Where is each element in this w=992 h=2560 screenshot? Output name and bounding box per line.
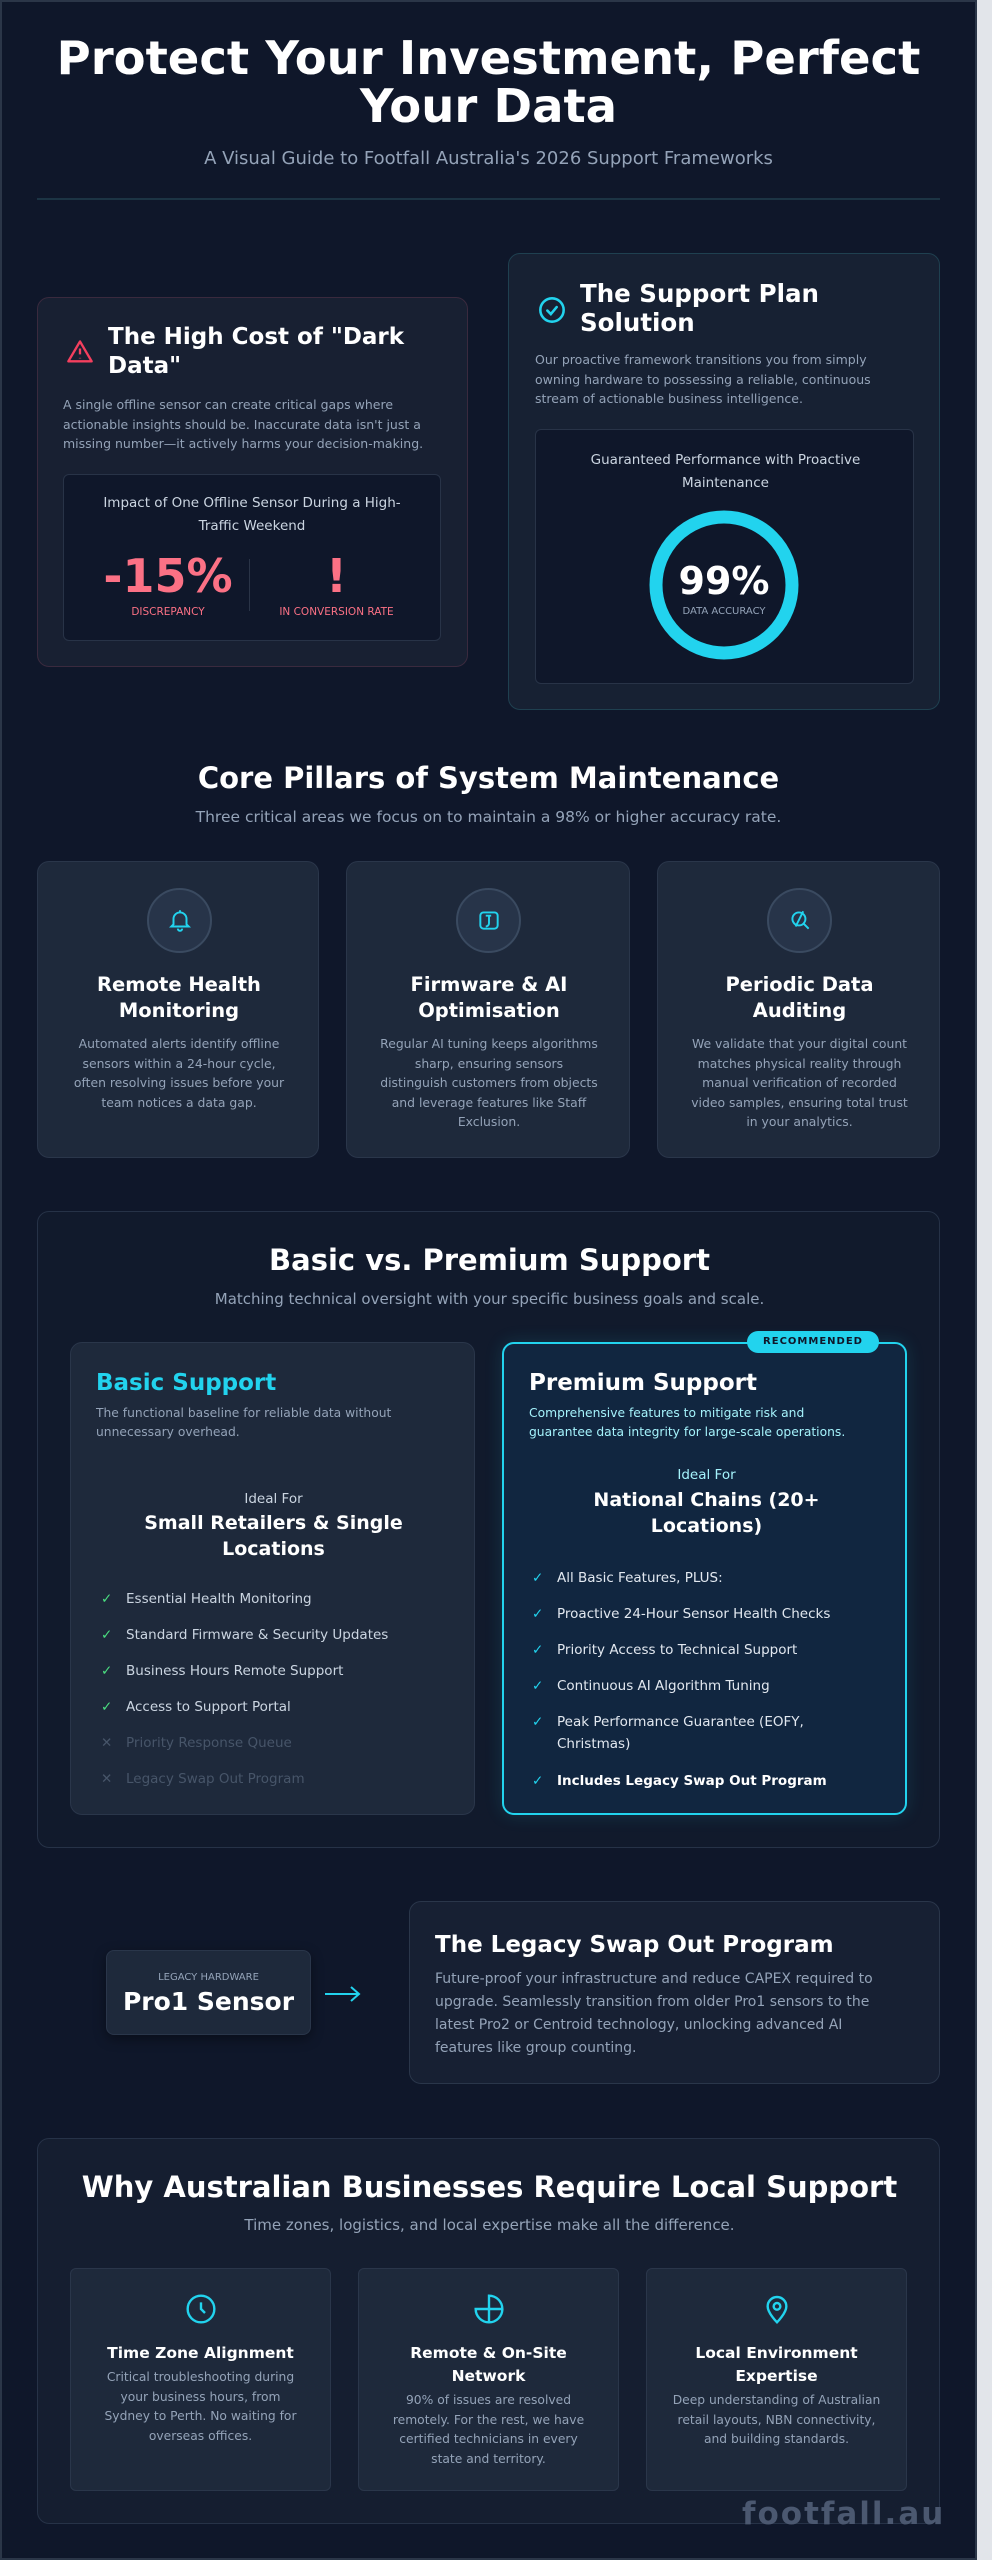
feature list: ✓ (532, 1606, 543, 1622)
card: basic: The functional baseline for reliable data without unnecessary overhead. (96, 1406, 391, 1439)
card: time zone (70, 2268, 331, 2491)
stat box (63, 474, 441, 641)
stat: conversion: IN CONVERSION RATE (279, 606, 394, 618)
card: premium: National Chains (20+ Locations) (593, 1489, 820, 1537)
card: basic: Small Retailers & Single Locations (144, 1512, 403, 1560)
feature list: Proactive 24-Hour Sensor Health Checks (557, 1606, 830, 1622)
feature list: Priority Access to Technical Support (557, 1642, 797, 1658)
feature list: ✓ (101, 1627, 112, 1643)
panel: local support: Time zones, logistics, and local expertise make all the difference. (244, 2216, 735, 2234)
heading: Basic vs. Premium Support (269, 1243, 710, 1277)
legacy hardware box: Pro1 Sensor (123, 1987, 294, 2016)
pillar: firmware: Firmware & AI Optimisation (411, 973, 567, 1022)
pillar: auditing: Periodic Data Auditing (725, 973, 874, 1022)
donut chart 99% (650, 510, 798, 660)
legacy hardware box: LEGACY HARDWARE (158, 1972, 259, 1983)
stat: -15%: -15% (103, 549, 233, 603)
feature list: ✓ (532, 1773, 543, 1789)
feature list: All Basic Features, PLUS: (557, 1570, 723, 1586)
pillar: firmware: Exclusion. (458, 1114, 520, 1129)
badge: recommended (747, 1331, 879, 1353)
pillar: firmware: distinguish customers from objects (380, 1075, 598, 1090)
heading: The Support Plan Solution (580, 279, 819, 337)
icon: audit (767, 888, 832, 953)
pillar: firmware: Regular AI tuning keeps algorithms (380, 1036, 598, 1051)
pillar: firmware: sharp, ensuring sensors (415, 1056, 563, 1071)
card: time zone: Time Zone Alignment (107, 2344, 294, 2362)
text: A single offline sensor can create critical gaps where actionable insights should be. Inaccurate data isn't just a missing number—it actively harms your decision-making. (63, 397, 423, 451)
feature list: Priority Response Queue (126, 1735, 292, 1751)
panel: basic vs premium (37, 1211, 940, 1848)
card: premium: Ideal For (677, 1467, 736, 1483)
title: Protect Your Investment, Perfect Your Data (57, 31, 920, 133)
feature list: ✓ (532, 1714, 543, 1730)
feature list: ✓ (532, 1642, 543, 1658)
pillar: auditing (657, 861, 940, 1158)
icon: firmware (456, 888, 521, 953)
panel: local support (37, 2138, 940, 2524)
feature list: Standard Firmware & Security Updates (126, 1627, 388, 1643)
feature list: ✓ (101, 1699, 112, 1715)
feature list: Essential Health Monitoring (126, 1591, 312, 1607)
stat box: Impact of One Offline Sensor During a High-Traffic Weekend (103, 495, 401, 534)
feature list: Continuous AI Algorithm Tuning (557, 1678, 770, 1694)
heading: The High Cost of "Dark Data" (108, 324, 404, 379)
card: network: 90% of issues are resolved remotely. For the rest, we have certified technicians in every state and territory. (393, 2393, 584, 2466)
panel: dark data (37, 297, 468, 667)
chart box: Guaranteed Performance with Proactive Maintenance (591, 452, 860, 491)
donut chart 99%: DATA ACCURACY (682, 606, 766, 617)
panel: legacy swap out: Future-proof your infrastructure and reduce CAPEX required to upgrade. Seamlessly transition from older Pro1 sensors to the latest Pro2 or Centroid technology, unlocking advanced AI features like group counting. (435, 1971, 873, 2056)
icon: bell (147, 888, 212, 953)
feature list: ✓ (532, 1678, 543, 1694)
feature list: ✕ (101, 1771, 112, 1787)
panel: legacy swap out (409, 1901, 940, 2084)
stat: conversion: ! (326, 549, 347, 603)
badge: recommended: RECOMMENDED (763, 1336, 863, 1347)
card: local expertise (646, 2268, 907, 2491)
icon: clock (186, 2294, 216, 2324)
panel: legacy swap out: The Legacy Swap Out Program (435, 1932, 834, 1958)
feature list: ✓ (101, 1591, 112, 1607)
chart box (535, 429, 914, 684)
feature list: ✓ (101, 1663, 112, 1679)
card: local expertise: Deep understanding of Australian retail layouts, NBN connectivity, and building standards. (673, 2393, 880, 2446)
card: network: Remote & On-Site Network (410, 2344, 567, 2385)
subtitle: A Visual Guide to Footfall Australia's 2026 Support Frameworks (204, 148, 773, 169)
pillar: remote health (37, 861, 319, 1158)
feature list: Includes Legacy Swap Out Program (557, 1773, 827, 1789)
pillar: firmware (346, 861, 630, 1158)
feature list: Access to Support Portal (126, 1699, 291, 1715)
icon: network (474, 2294, 504, 2324)
feature list (101, 1591, 388, 1787)
card: premium (502, 1342, 907, 1815)
donut chart 99%: 99% (679, 559, 769, 603)
pillar: firmware: and leverage features like Staff (392, 1095, 586, 1110)
subtitle: Matching technical oversight with your specific business goals and scale. (215, 1290, 764, 1308)
feature list: Business Hours Remote Support (126, 1663, 343, 1679)
card: basic: Basic Support (96, 1370, 276, 1396)
feature list: Peak Performance Guarantee (EOFY, Christmas) (557, 1714, 804, 1752)
card: network (358, 2268, 619, 2491)
panel: support plan solution (508, 253, 940, 710)
subtitle: Three critical areas we focus on to maintain a 98% or higher accuracy rate. (196, 808, 781, 826)
icon: check circle (539, 297, 565, 323)
panel: local support: Why Australian Businesses Require Local Support (82, 2170, 897, 2204)
text: Our proactive framework transitions you from simply owning hardware to possessing a reliable, continuous stream of actionable business intelligence. (535, 352, 871, 406)
card: premium: Comprehensive features to mitigate risk and guarantee data integrity for large-scale operations. (529, 1406, 845, 1439)
card: basic: Ideal For (244, 1491, 303, 1507)
card: local expertise: Local Environment Expertise (695, 2344, 858, 2385)
feature list: ✓ (532, 1570, 543, 1586)
feature list (532, 1570, 830, 1789)
icon: warning (67, 340, 93, 362)
stat: -15%: DISCREPANCY (131, 606, 205, 618)
feature list: Legacy Swap Out Program (126, 1771, 305, 1787)
card: time zone: Critical troubleshooting during your business hours, from Sydney to Perth. No waiting for overseas offices. (104, 2370, 296, 2443)
feature list: ✕ (101, 1735, 112, 1751)
icon: map pin (766, 2296, 788, 2324)
watermark: footfall.au: footfall.au (742, 2496, 945, 2532)
heading: core pillars: Core Pillars of System Maintenance (198, 761, 779, 795)
pillar: remote health: Remote Health Monitoring (97, 973, 261, 1022)
card: premium: Premium Support (529, 1370, 757, 1396)
stat: conversion (279, 549, 394, 618)
legacy hardware box (106, 1950, 311, 2035)
card: basic (70, 1342, 475, 1815)
pillar: remote health: Automated alerts identify offline sensors within a 24-hour cycle, often resolving issues before your team notices a data gap. (74, 1036, 284, 1110)
arrow (325, 1986, 360, 2002)
pillar: auditing: We validate that your digital count matches physical reality through manual verification of recorded video samples, ensuring total trust in your analytics. (691, 1036, 908, 1129)
